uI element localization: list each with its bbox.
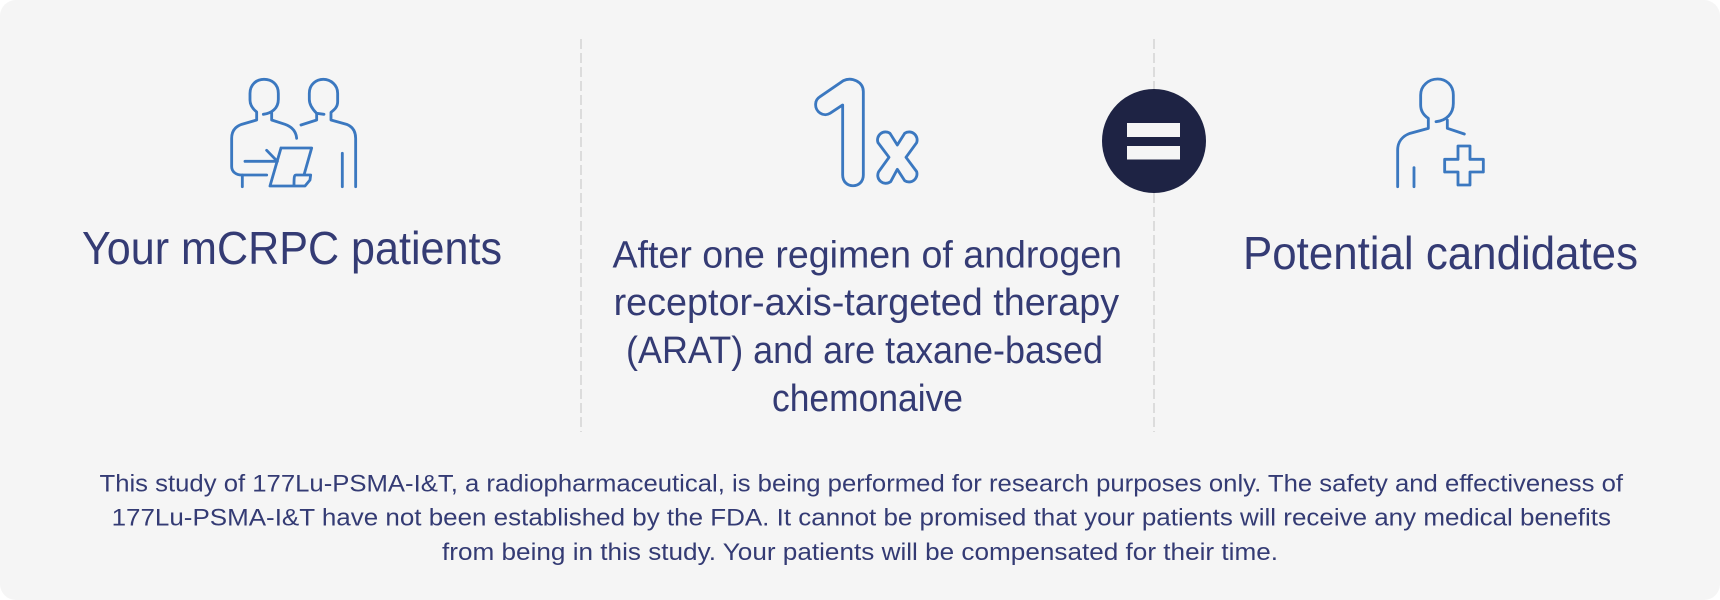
text: after one regimen: receptor-axis-targeted therapy (614, 282, 1119, 324)
footnote: 177Lu-PSMA-I&T have not been established by the FDA. It cannot be promised that your patients will receive any medical benefits (112, 505, 1611, 532)
icon: equals sign in circle (1102, 89, 1206, 193)
text: after one regimen (612, 235, 1122, 420)
footnote (100, 471, 1623, 566)
heading: your mCRPC patients: Your mCRPC patients (82, 222, 502, 274)
heading: potential candidates: Potential candidates (1243, 227, 1638, 279)
text: after one regimen: After one regimen of androgen (612, 235, 1122, 277)
footnote: This study of 177Lu-PSMA-I&T, a radiopharmaceutical, is being performed for research purposes only. The safety and effectiveness of (100, 471, 1623, 498)
text: after one regimen: (ARAT) and are taxane-based (626, 330, 1103, 372)
icon: 1x (816, 79, 917, 186)
dashed divider right (1153, 39, 1155, 432)
footnote: from being in this study. Your patients will be compensated for their time. (442, 539, 1278, 566)
icon: two people with tablet (232, 79, 356, 187)
icon: person with medical cross (1398, 79, 1483, 187)
dashed divider left (580, 39, 582, 432)
text: after one regimen: chemonaive (772, 378, 963, 420)
